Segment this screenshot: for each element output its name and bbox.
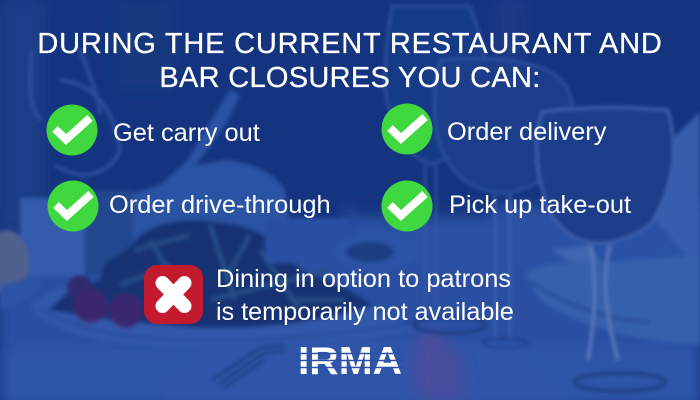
glass left (30, 50, 120, 175)
icon: check drive-through (48, 180, 98, 232)
fork (212, 345, 285, 388)
glass 1 (385, 6, 488, 165)
title (37, 28, 663, 94)
text: drive-through: Order drive-through (109, 191, 331, 219)
icon: check delivery (382, 104, 432, 154)
glass 2 (435, 59, 572, 193)
text: dining in not available: Dining in option to patrons (216, 265, 511, 293)
lower plate (165, 340, 570, 400)
icon: check carry out (46, 104, 98, 156)
text: delivery: Order delivery (447, 118, 606, 146)
text: take-out: Pick up take-out (449, 191, 631, 219)
title: BAR CLOSURES YOU CAN: (159, 62, 541, 94)
icon: red cross (144, 265, 203, 324)
food beyond plate (265, 218, 350, 263)
text: dining in not available: is temporarily not available (216, 298, 514, 326)
napkin left (110, 90, 290, 245)
salad (48, 220, 372, 328)
icon: check take-out (382, 180, 432, 232)
bread (0, 230, 29, 294)
glass 3 (537, 107, 674, 243)
napkin holder (20, 198, 85, 276)
plate (29, 285, 420, 349)
grapes (67, 275, 93, 301)
title: DURING THE CURRENT RESTAURANT AND (37, 28, 663, 60)
soft red food (412, 330, 468, 400)
right plate and napkin (640, 112, 700, 270)
text: carry out: Get carry out (113, 119, 260, 147)
text: dining in not available (216, 265, 514, 326)
